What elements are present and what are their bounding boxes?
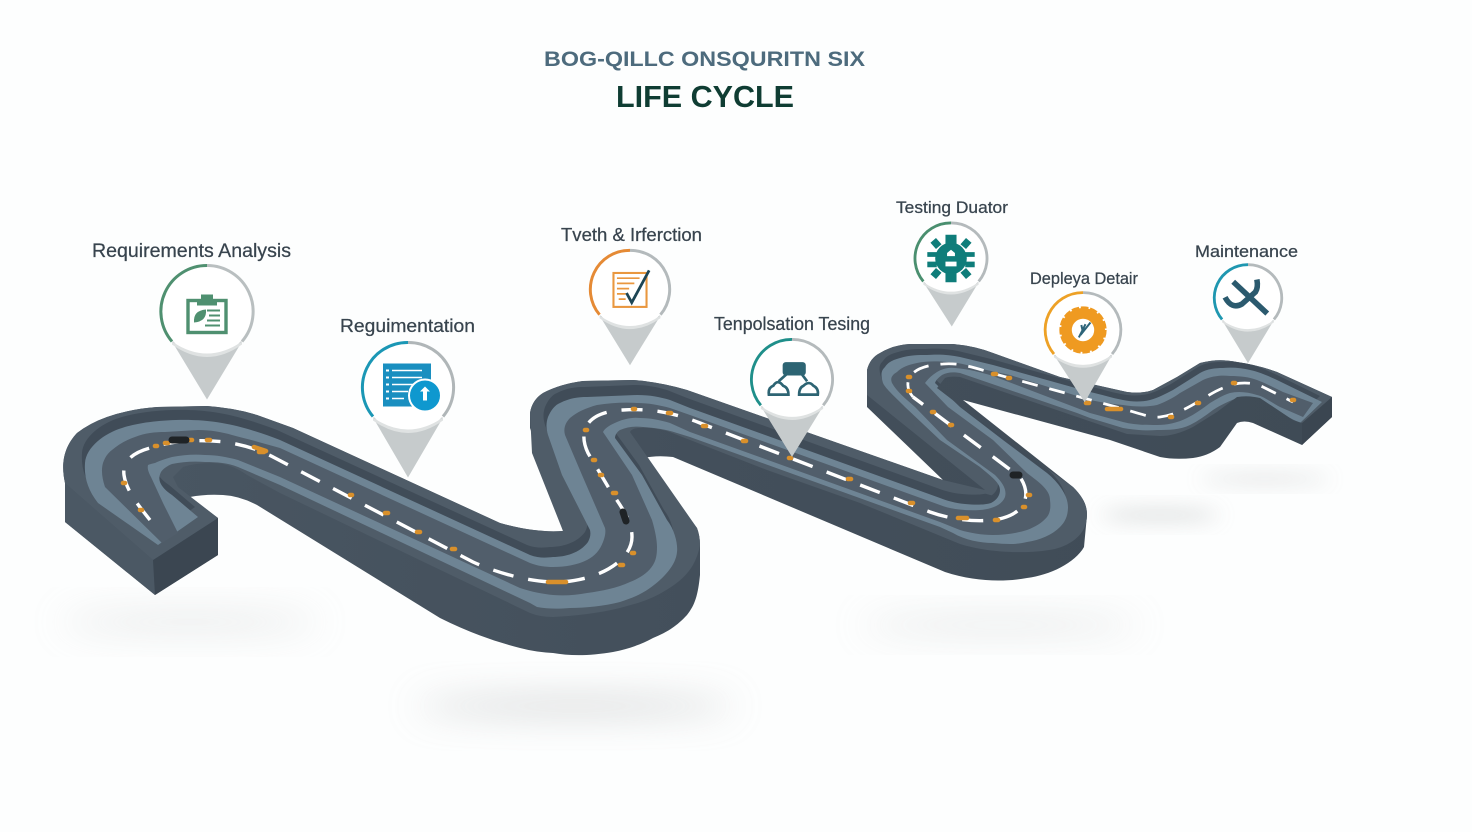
label: Maintenance — [1195, 242, 1298, 261]
winding road — [63, 344, 1332, 655]
pin: Reguimentation — [340, 315, 475, 478]
pin: Maintenance — [1195, 242, 1298, 363]
pin: Depleya Detair — [1030, 270, 1138, 402]
pin: Requirements Analysis — [92, 241, 291, 400]
label: Tenpolsation Tesing — [714, 314, 870, 334]
subtitle line: BOG-QILLC ONSQURITN SIX — [544, 48, 865, 71]
pin: Tveth & Irferction — [561, 225, 702, 365]
label: Reguimentation — [340, 315, 475, 336]
marker — [1214, 265, 1282, 363]
icon: checklist — [613, 270, 649, 307]
label: Requirements Analysis — [92, 241, 291, 262]
icon: clipboard — [188, 294, 226, 332]
left outer wall — [65, 483, 155, 595]
start end face — [153, 518, 218, 595]
icon: gear bug — [927, 235, 975, 282]
black road marks — [172, 440, 1019, 521]
icon: document with badge — [383, 364, 441, 412]
marker — [915, 223, 987, 326]
orange road markers — [123, 374, 1294, 582]
label: Depleya Detair — [1030, 270, 1138, 288]
lane bands — [82, 345, 1322, 609]
pin: Tenpolsation Tesing — [714, 314, 870, 457]
road top surface — [63, 344, 1332, 617]
white centre dashes — [124, 364, 1293, 582]
main title: LIFE CYCLE — [616, 79, 794, 114]
icon: wrench and screwdriver — [1225, 280, 1267, 314]
marker — [751, 339, 833, 457]
far side groove, distant part — [880, 348, 1320, 496]
light shoulder band — [85, 355, 1322, 609]
icon: network diagram — [769, 363, 818, 395]
asphalt lane — [102, 361, 1313, 595]
road body silhouette — [63, 344, 1332, 655]
label: Testing Duator — [896, 199, 1009, 217]
icon: orange gear — [1061, 308, 1105, 352]
pin: Testing Duator — [896, 199, 1009, 326]
label: Tveth & Irferction — [561, 225, 702, 245]
marker — [161, 265, 253, 400]
finish end face — [1302, 397, 1332, 445]
marker — [590, 250, 670, 365]
ground shadows — [60, 476, 1330, 715]
title — [544, 48, 865, 114]
far side groove, near part — [82, 385, 998, 558]
marker — [362, 342, 454, 478]
marker — [1045, 293, 1121, 402]
